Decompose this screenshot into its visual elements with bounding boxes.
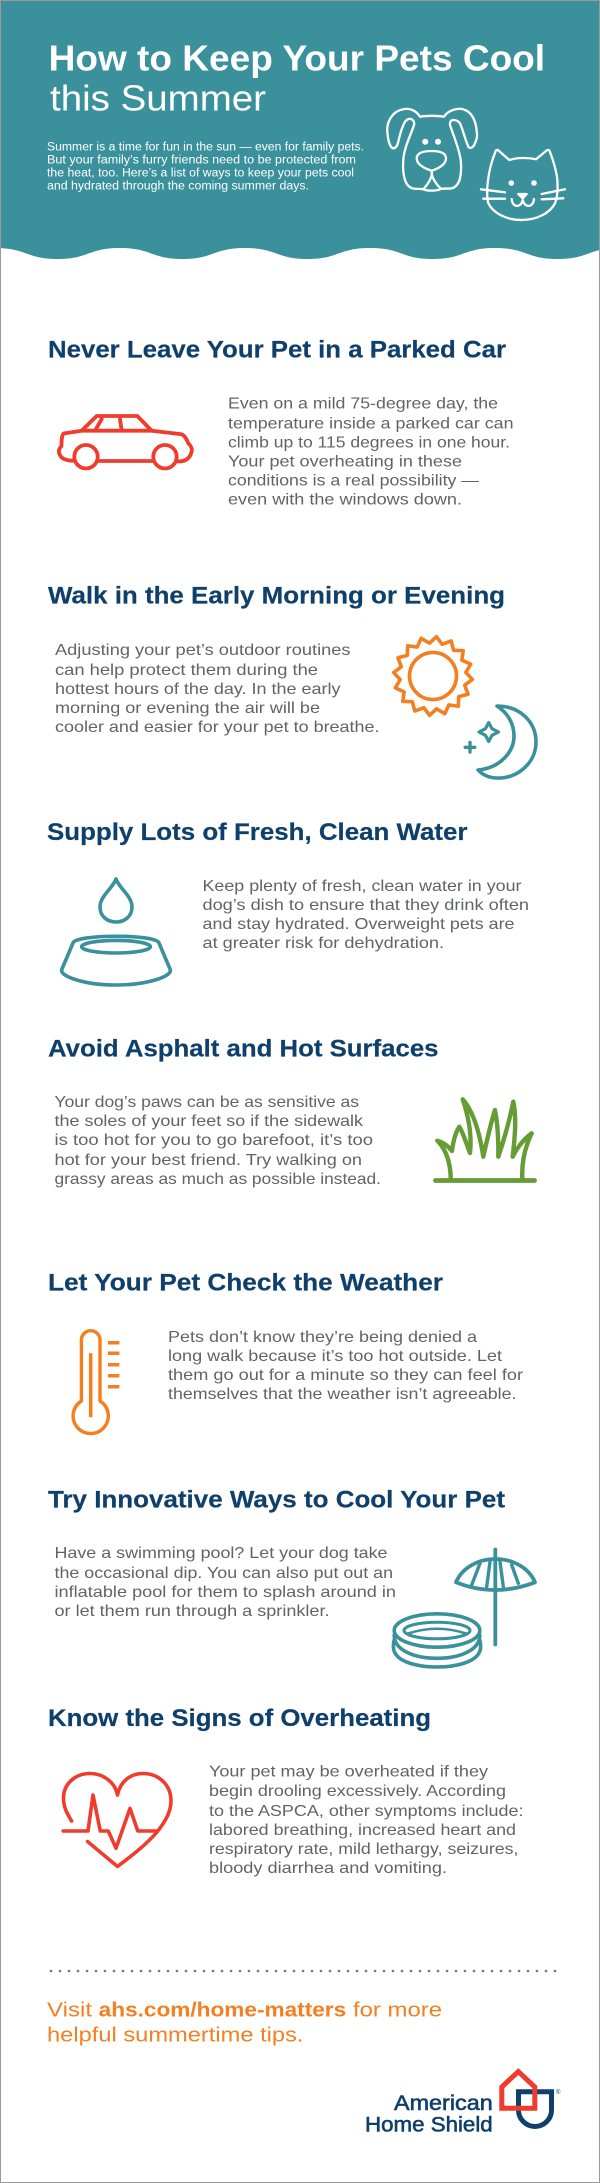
heading: weather: Let Your Pet Check the Weather: [48, 1270, 443, 1297]
icon: dog: [387, 109, 477, 191]
heading: walk times: Walk in the Early Morning or Evening: [48, 582, 505, 609]
body text: hot surfaces: hot for your best friend. Try walking on: [54, 1152, 362, 1169]
icon: cat: [481, 150, 565, 220]
body text: overheating: bloody diarrhea and vomiting.: [209, 1860, 447, 1877]
logo: American Home Shield: [365, 2072, 561, 2137]
body text: parked car: [228, 396, 514, 509]
logo: American Home Shield: American: [394, 2092, 493, 2115]
icon: inflatable pool: [393, 1614, 481, 1667]
body text: cooling: inflatable pool for them to splash around in: [54, 1584, 396, 1601]
title: How to Keep Your Pets Cool: [49, 38, 545, 79]
body text: parked car: even with the windows down.: [228, 492, 462, 509]
body text: hot surfaces: Your dog’s paws can be as sensitive as: [54, 1094, 359, 1111]
header banner with wavy edge: [0, 0, 600, 259]
body text: hot surfaces: grassy areas as much as possible instead.: [54, 1171, 381, 1188]
icon: car: [59, 416, 192, 468]
logo: American Home Shield: Home Shield: [365, 2114, 493, 2137]
body text: overheating: begin drooling excessively. According: [209, 1783, 506, 1800]
icon: water drop and bowl: [62, 879, 170, 985]
body text: parked car: temperature inside a parked car can: [228, 416, 514, 433]
title: this Summer: [50, 78, 266, 119]
intro text: But your family’s furry friends need to be protected from: [47, 155, 356, 167]
body text: weather: Pets don’t know they’re being denied a: [168, 1329, 477, 1346]
body text: weather: long walk because it’s too hot outside. Let: [168, 1348, 503, 1365]
body text: hot surfaces: is too hot for you to go barefoot, it’s too: [54, 1132, 373, 1149]
body text: overheating: respiratory rate, mild lethargy, seizures,: [209, 1841, 518, 1858]
body text: overheating: to the ASPCA, other symptoms include:: [209, 1803, 524, 1820]
body text: water: and stay hydrated. Overweight pets are: [202, 916, 515, 933]
body text: cooling: or let them run through a sprinkler.: [54, 1603, 330, 1620]
body text: parked car: Your pet overheating in these: [228, 454, 462, 471]
intro text: Summer is a time for fun in the sun — even for family pets.: [47, 142, 364, 154]
call to action: Visit: [47, 1999, 92, 2022]
title: [49, 38, 545, 119]
icon: grass: [436, 1099, 534, 1180]
body text: weather: themselves that the weather isn’t agreeable.: [168, 1386, 516, 1403]
call to action: for more: [353, 1999, 442, 2022]
body text: water: at greater risk for dehydration.: [202, 935, 444, 952]
call to action: helpful summertime tips.: [47, 2024, 304, 2047]
call to action: ahs.com/home-matters: [99, 1999, 346, 2022]
body text: cooling: [54, 1545, 396, 1620]
body text: walk times: [55, 642, 380, 736]
body text: water: [202, 878, 529, 952]
heading: cooling: Try Innovative Ways to Cool Your Pet: [48, 1487, 505, 1514]
icon: heart with pulse: [63, 1774, 171, 1866]
heading: water: Supply Lots of Fresh, Clean Water: [47, 819, 468, 846]
icon: sun: [390, 633, 476, 719]
body text: walk times: cooler and easier for your pet to breathe.: [55, 719, 380, 736]
body text: cooling: the occasional dip. You can also put out an: [54, 1565, 393, 1582]
body text: overheating: [209, 1764, 524, 1877]
call to action: [47, 1999, 442, 2047]
body text: overheating: labored breathing, increased heart and: [209, 1822, 516, 1839]
heading: parked car: Never Leave Your Pet in a Parked Car: [48, 336, 506, 363]
intro text: [47, 142, 364, 193]
icon: thermometer: [73, 1331, 119, 1434]
body text: water: Keep plenty of fresh, clean water in your: [202, 878, 522, 895]
body text: walk times: morning or evening the air will be: [55, 700, 320, 717]
intro text: the heat, too. Here’s a list of ways to keep your pets cool: [47, 168, 354, 180]
body text: hot surfaces: the soles of your feet so if the sidewalk: [54, 1113, 364, 1130]
body text: walk times: hottest hours of the day. In the early: [55, 681, 340, 698]
body text: walk times: can help protect them during the: [55, 662, 318, 679]
body text: parked car: Even on a mild 75-degree day, the: [228, 396, 498, 413]
logo: American Home Shield: ®: [556, 2089, 561, 2096]
body text: cooling: Have a swimming pool? Let your dog take: [54, 1545, 388, 1562]
body text: water: dog’s dish to ensure that they drink often: [202, 897, 529, 914]
heading: hot surfaces: Avoid Asphalt and Hot Surfaces: [48, 1036, 438, 1063]
intro text: and hydrated through the coming summer days.: [47, 181, 309, 193]
icon: umbrella: [456, 1550, 535, 1644]
heading: overheating: Know the Signs of Overheating: [48, 1705, 431, 1732]
body text: overheating: Your pet may be overheated if they: [209, 1764, 488, 1781]
body text: weather: [168, 1329, 524, 1403]
body text: weather: them go out for a minute so they can feel for: [168, 1367, 524, 1384]
body text: walk times: Adjusting your pet’s outdoor routines: [55, 642, 350, 659]
icon: moon and stars: [465, 706, 536, 778]
body text: parked car: conditions is a real possibility —: [228, 473, 479, 490]
body text: parked car: climb up to 115 degrees in one hour.: [228, 435, 510, 452]
body text: hot surfaces: [54, 1094, 381, 1188]
